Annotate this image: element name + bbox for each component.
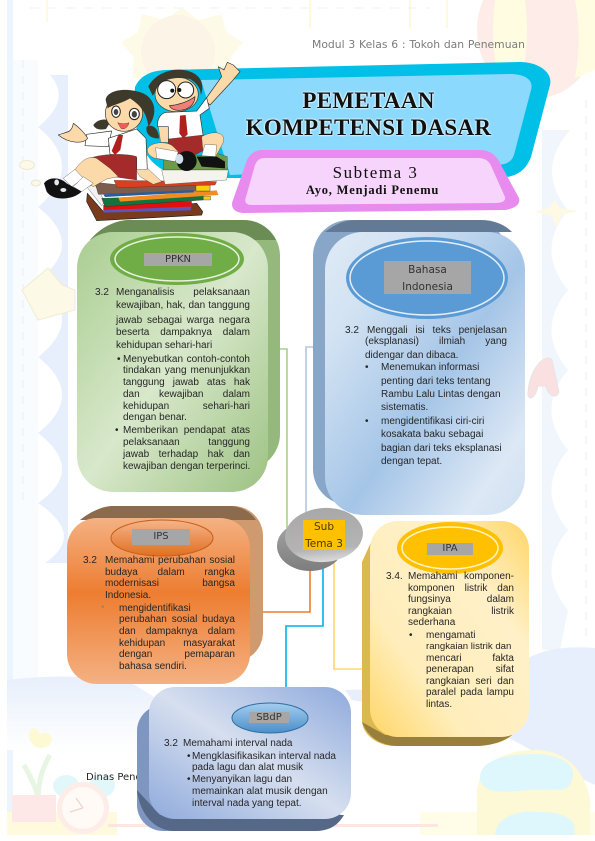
text: IPA content: mengamati	[426, 630, 475, 641]
title	[245, 88, 492, 140]
header text: Modul 3 Kelas 6 : Tokoh dan Penemuan	[312, 38, 525, 51]
label: IPS: IPS	[153, 531, 169, 542]
text: PPKN content: tanggung jawab atas hak	[123, 377, 250, 388]
panel shape: Bahasa Indonesia	[313, 220, 525, 515]
illustration: two cartoon pupils on books	[44, 62, 240, 221]
text: IPS content: •	[101, 602, 105, 613]
text: IPA content: fungsinya dalam	[408, 594, 514, 605]
text: Bahasa Indonesia content: bagian dari teks eksplanasi	[381, 443, 502, 454]
text: SBdP content: Memahami interval nada	[183, 738, 292, 749]
title banner shape	[134, 62, 550, 178]
text: SBdP content: Menyanyikan lagu dan	[192, 774, 292, 785]
text: Bahasa Indonesia content: penting dari teks tentang	[381, 376, 491, 387]
text: IPS content	[83, 555, 235, 672]
label: PPKN: PPKN	[165, 254, 191, 265]
text: IPA content: •	[409, 630, 413, 641]
text: SBdP content: •	[187, 751, 191, 762]
text: SBdP content: pada lagu dan alat musik	[192, 762, 303, 773]
text: Bahasa Indonesia content: kosakata baku sebagai	[381, 429, 483, 440]
text: PPKN content: kewajiban dengan terperinci.	[123, 461, 250, 472]
boy	[205, 62, 240, 105]
label: SBdP: SBdP	[256, 712, 282, 723]
text: IPA content: komponen listrik dan	[408, 583, 514, 594]
text: PPKN content: Memberikan pendapat atas	[123, 425, 250, 436]
text: PPKN content: dan kewajiban dalam	[123, 389, 250, 400]
text: IPS content: 3.2	[83, 555, 97, 566]
text: PPKN content	[95, 287, 250, 472]
label: Bahasa Indonesia: Bahasa	[408, 264, 447, 276]
text: IPA content: sederhana	[408, 617, 455, 628]
text: IPS content: bahasa sendiri.	[119, 661, 187, 672]
hub shape: Sub Tema 3	[277, 505, 365, 571]
text: IPA content: penerapan sifat	[426, 664, 514, 675]
text: IPS content: kehidupan masyarakat	[119, 638, 235, 649]
text: Bahasa Indonesia content: mengidentifikasi ciri-ciri	[381, 416, 484, 427]
text: SBdP content: 3.2	[164, 738, 178, 749]
text: SBdP content: Mengklasifikasikan interval nada	[192, 751, 336, 762]
title: PEMETAAN	[302, 88, 435, 113]
label: Bahasa Indonesia: Indonesia	[402, 280, 453, 292]
text: Bahasa Indonesia content: Rambu Lalu Lintas dengan	[381, 389, 501, 400]
title: KOMPETENSI DASAR	[246, 115, 491, 140]
text: PPKN content: Menganalisis pelaksanaan	[116, 287, 250, 298]
text: IPA content: lintas.	[426, 699, 452, 710]
text: IPS content: Indonesia.	[105, 590, 151, 601]
text: IPS content: Memahami perubahan sosial	[105, 555, 235, 566]
text: IPS content: dengan pemaparan	[119, 649, 235, 660]
text: Bahasa Indonesia content: dengan tepat.	[381, 456, 442, 467]
text: Bahasa Indonesia content: Menemukan informasi	[381, 362, 479, 373]
subtitle banner shape	[232, 150, 519, 213]
panel shape: SBdP	[137, 687, 351, 831]
text: PPKN content: •	[117, 354, 121, 365]
text: IPS content: mengidentifikasi	[119, 603, 191, 614]
connector lines	[263, 347, 376, 690]
text: PPKN content: •	[115, 425, 119, 436]
text: PPKN content: kewajiban, hak, dan tanggung	[116, 300, 250, 311]
text: PPKN content: dengan benar.	[123, 412, 187, 423]
text: PPKN content: kehidupan sehari-hari	[123, 401, 250, 412]
text: IPA content: 3.4.	[386, 571, 403, 582]
panel shape: PPKN	[77, 220, 280, 492]
text: SBdP content	[164, 738, 336, 809]
text: PPKN content: pelaksanaan tanggung	[123, 437, 250, 448]
girl	[93, 119, 111, 129]
subtitle theme: Ayo, Menjadi Penemu	[306, 183, 439, 197]
hub label: Sub Tema 3	[305, 521, 343, 550]
text: PPKN content: jawab terhadap hak dan	[123, 449, 250, 460]
text: Bahasa Indonesia content: sistematis.	[381, 402, 428, 413]
text: Bahasa Indonesia content	[345, 325, 507, 467]
text: IPS content: budaya dalam rangka	[105, 567, 235, 578]
panel shape: IPA	[362, 521, 529, 746]
text: PPKN content: tindakan yang menunjukkan	[123, 365, 250, 376]
text: PPKN content: 3.2	[95, 287, 109, 298]
text: IPA content: rangkaian seri dan	[426, 676, 514, 687]
text: IPA content: paralel pada lampu	[426, 687, 514, 698]
text: Bahasa Indonesia content: didengar dan dibaca.	[365, 350, 458, 361]
text: Bahasa Indonesia content: •	[365, 362, 369, 373]
text: SBdP content: interval nada yang tepat.	[192, 798, 302, 809]
label: Bahasa Indonesia	[402, 264, 453, 292]
text: Bahasa Indonesia content: Menggali isi teks penjelasan	[367, 325, 507, 336]
label: IPA: IPA	[442, 543, 458, 554]
text: IPS content: perubahan sosial budaya	[119, 614, 235, 625]
text: PPKN content: Menyebutkan contoh-contoh	[123, 354, 250, 365]
text: PPKN content: kehidupan sehari-hari	[116, 340, 212, 351]
text: Bahasa Indonesia content: 3.2	[345, 325, 359, 336]
hub label: Sub Tema 3: Sub	[314, 521, 334, 533]
text: Bahasa Indonesia content: (eksplanasi) ilmiah yang	[365, 336, 507, 347]
text: IPA content: rangkaian listrik dan	[426, 641, 511, 652]
text: SBdP content: memainkan alat musik dengan	[192, 786, 328, 797]
text: SBdP content: •	[187, 774, 191, 785]
text: PPKN content: beserta dampaknya dalam	[116, 327, 250, 338]
panel shape: IPS	[67, 506, 263, 684]
text: IPS content: modernisasi bangsa	[105, 578, 235, 589]
text: Bahasa Indonesia content: •	[365, 416, 369, 427]
hub label: Sub Tema 3: Tema 3	[305, 538, 343, 550]
text: IPA content: rangkaian listrik	[408, 606, 514, 617]
text: IPA content: mencari fakta	[426, 653, 514, 664]
text: IPS content: dan dampaknya dalam	[119, 626, 235, 637]
text: IPA content	[386, 571, 514, 710]
subtitle: Subtema 3	[333, 163, 418, 182]
text: PPKN content: jawab sebagai warga negara	[116, 315, 250, 326]
text: IPA content: Memahami komponen-	[408, 571, 514, 582]
